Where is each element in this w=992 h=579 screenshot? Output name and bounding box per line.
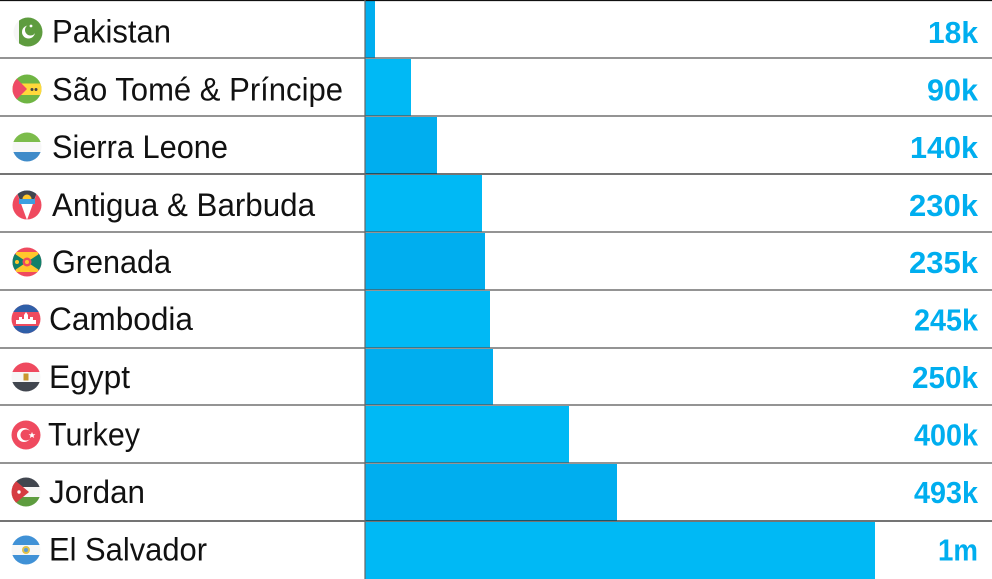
row: El Salvador: El Salvador <box>49 532 207 568</box>
row: El Salvador <box>12 536 976 564</box>
row: São Tomé & Príncipe: São Tomé & Príncipe <box>52 72 343 108</box>
row: Pakistan: 18k <box>928 15 979 50</box>
row: Turkey <box>12 420 978 452</box>
icon: Grenada flag <box>12 247 42 277</box>
row: Cambodia: Cambodia <box>49 301 193 337</box>
row: Grenada: 235k <box>909 245 979 280</box>
row: São Tomé & Príncipe: 90k <box>927 72 979 108</box>
row: São Tomé & Príncipe <box>12 72 979 108</box>
row: Egypt: Egypt <box>49 359 130 395</box>
icon: São Tomé & Príncipe flag <box>12 74 42 104</box>
icon: Pakistan flag <box>14 17 43 47</box>
row: Sierra Leone: Sierra Leone <box>52 129 228 165</box>
icon: Jordan flag <box>11 477 41 507</box>
row: Turkey: 400k <box>914 418 979 452</box>
row: Grenada: Grenada <box>52 244 171 280</box>
row: Pakistan <box>14 18 978 46</box>
icon: Egypt flag <box>12 362 40 392</box>
row: Cambodia <box>12 304 978 334</box>
icon: Cambodia flag <box>11 304 41 334</box>
row: Jordan <box>12 478 978 506</box>
icon: Antigua & Barbuda flag <box>12 190 42 220</box>
row: Jordan: Jordan <box>49 474 145 510</box>
row: Jordan: 493k <box>914 475 979 510</box>
row: Pakistan: Pakistan <box>52 14 171 50</box>
row: El Salvador: 1m <box>938 532 978 568</box>
row: Sierra Leone: 140k <box>910 130 979 165</box>
row: Cambodia: 245k <box>914 302 979 338</box>
row: Antigua & Barbuda: 230k <box>909 188 979 223</box>
icon: Sierra Leone flag <box>14 132 40 162</box>
icon: Turkey flag <box>11 420 41 450</box>
row: Turkey: Turkey <box>48 416 140 452</box>
row: Antigua & Barbuda <box>12 190 978 222</box>
row: Sierra Leone <box>14 132 978 162</box>
row: Antigua & Barbuda: Antigua & Barbuda <box>52 187 315 223</box>
row: Grenada <box>12 248 978 276</box>
row: Egypt <box>12 362 978 394</box>
row: Egypt: 250k <box>912 360 979 395</box>
icon: El Salvador flag <box>12 536 40 564</box>
